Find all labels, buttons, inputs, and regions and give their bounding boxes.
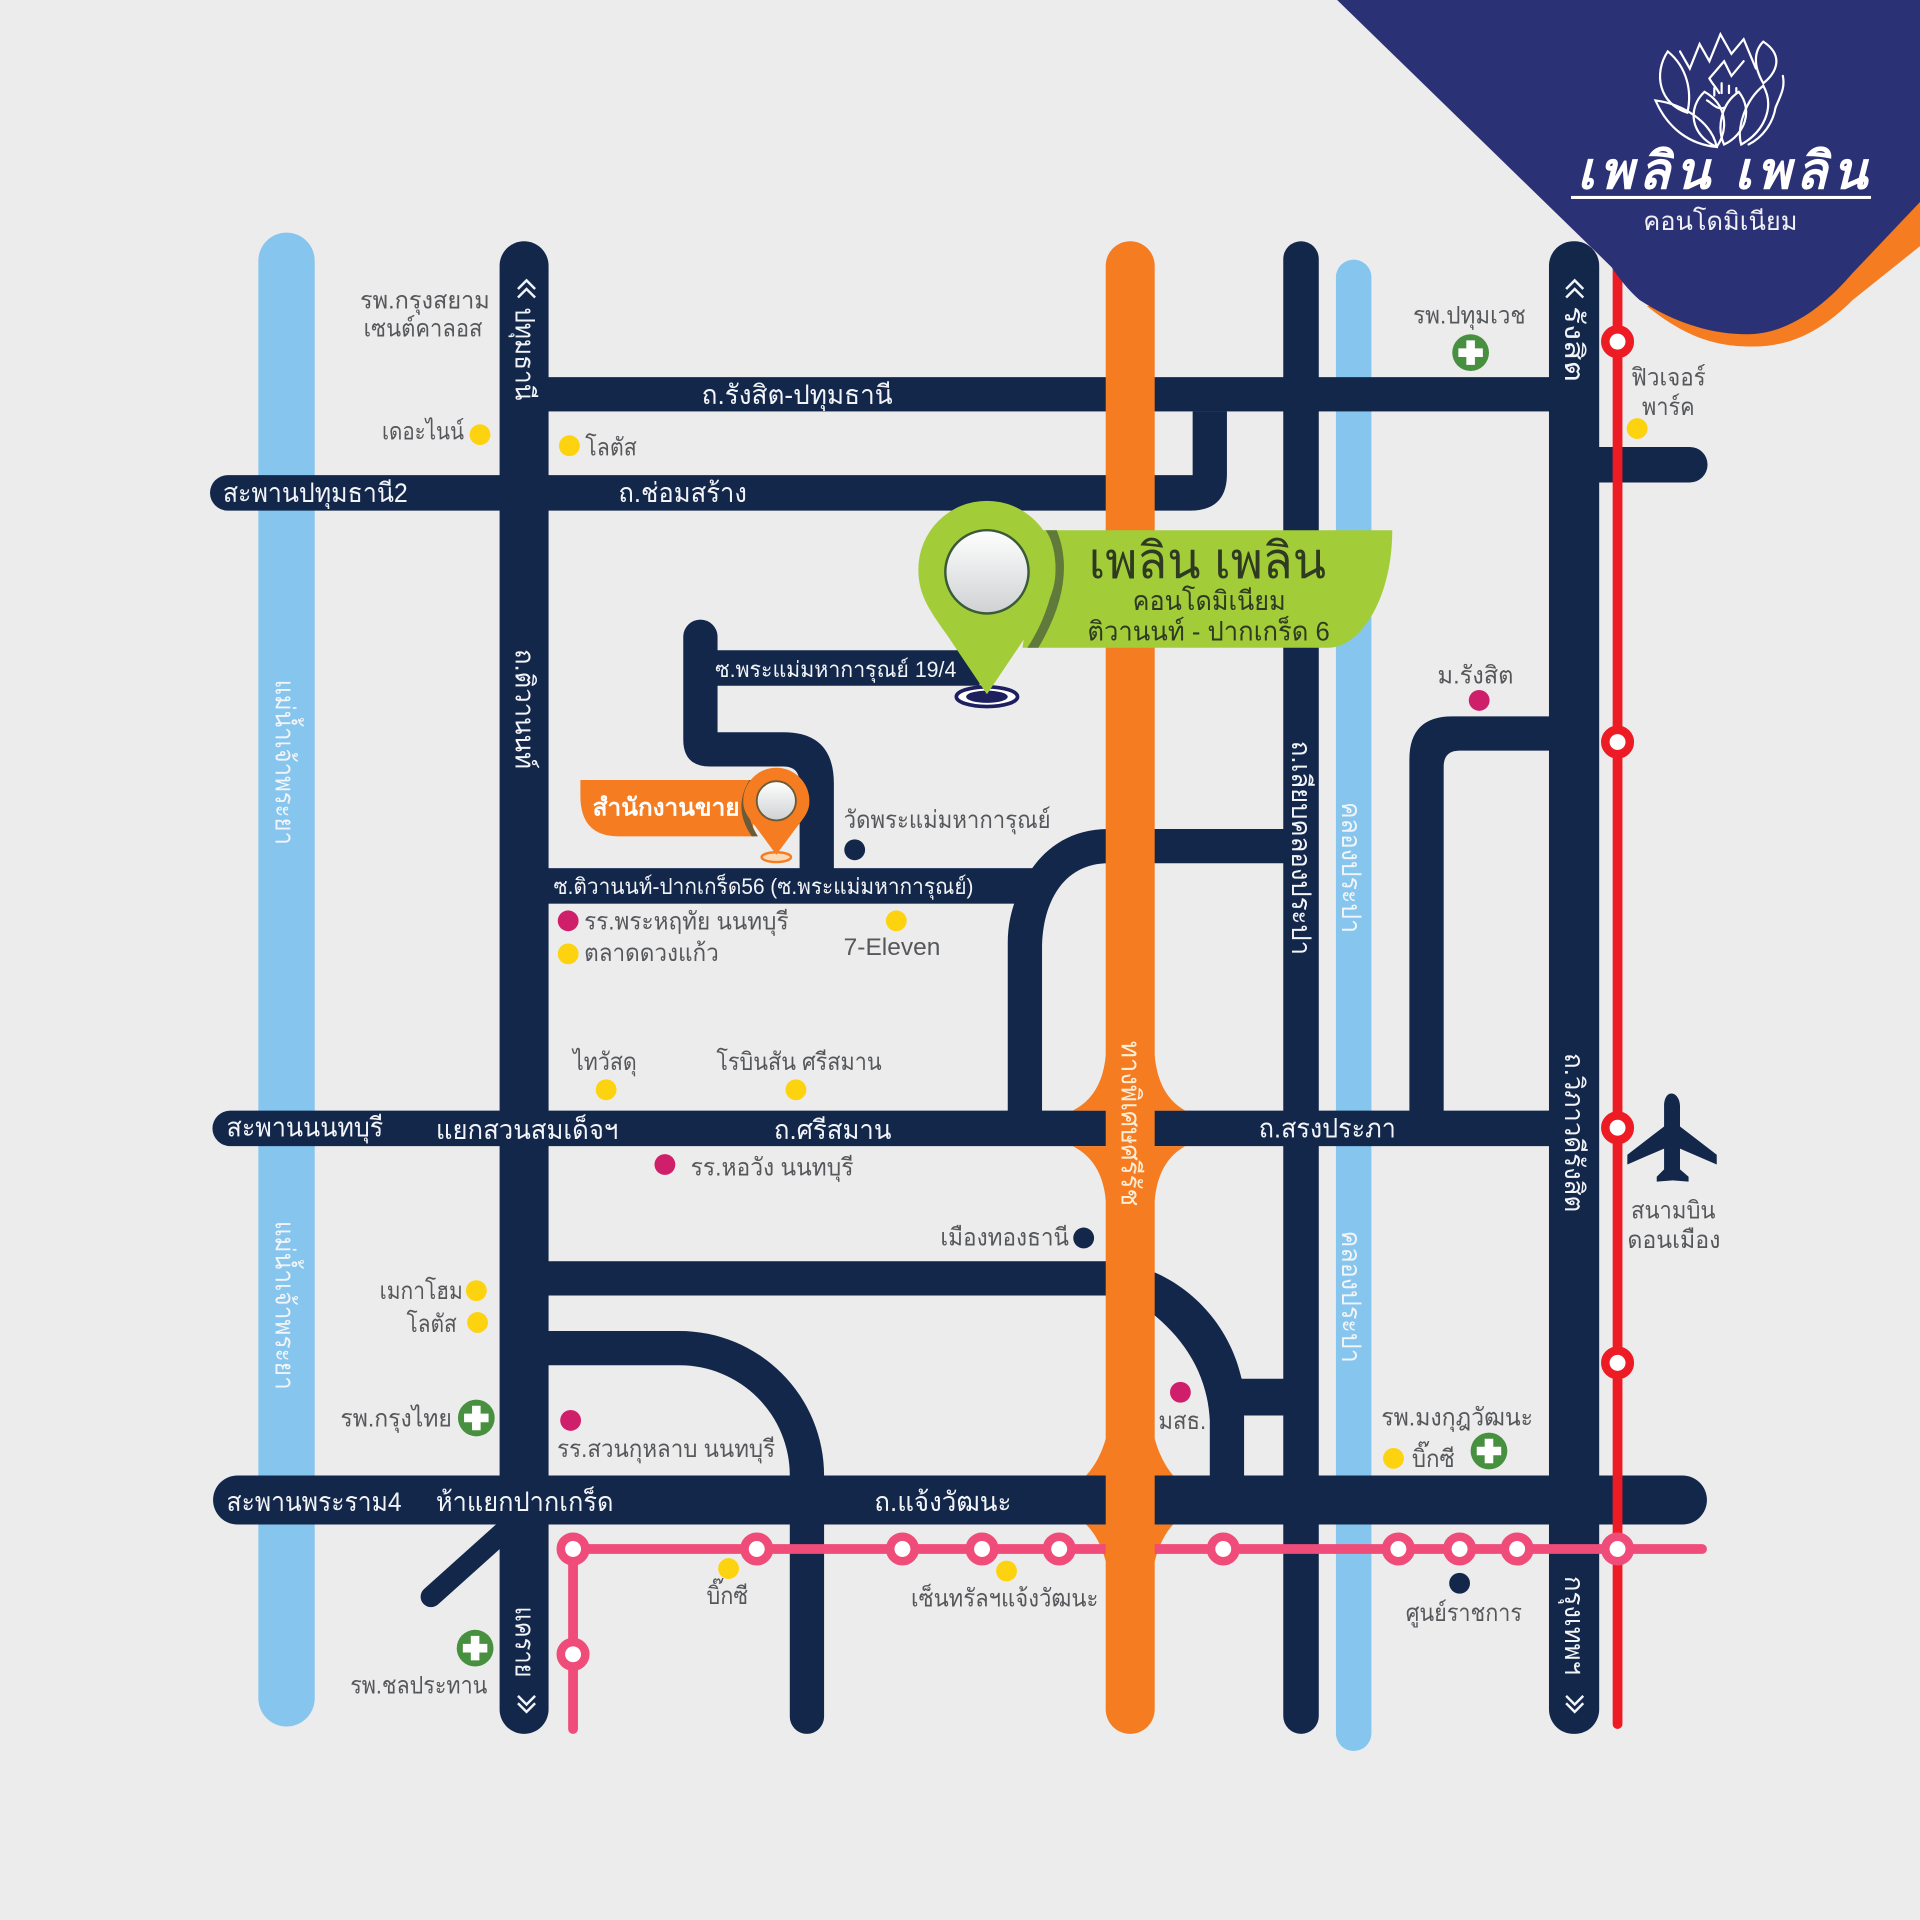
landmark dots: yellow [466, 418, 1648, 1581]
road labels horizontal: ถ.แจ้งวัฒนะ [874, 1487, 1011, 1517]
road labels vertical: ถ.วิภาวดีรังสิต [1559, 1053, 1589, 1212]
landmark labels: สนามบิน [1631, 1197, 1716, 1224]
landmark labels: รร.สวนกุหลาบ นนทบุรี [557, 1436, 775, 1464]
landmark labels [340, 288, 1720, 1699]
road labels vertical: แม่น้ำเจ้าพระยา [270, 1221, 305, 1390]
landmark labels: ศูนย์ราชการ [1406, 1599, 1522, 1628]
road labels vertical: ถ.เลียบคลองประปา [1286, 741, 1316, 955]
road labels vertical: แคราย [510, 1607, 540, 1678]
landmark labels: เซ็นทรัลฯแจ้งวัฒนะ [911, 1583, 1098, 1613]
project callout: green pin and banner: คอนโดมิเนียม [1133, 586, 1286, 616]
header corner panel [1337, 0, 1920, 347]
landmark labels: มสธ. [1158, 1408, 1206, 1435]
logotype: เพลิน เพลิน [1577, 142, 1869, 200]
road labels horizontal: ถ.สรงประภา [1259, 1114, 1396, 1144]
landmark labels: ดอนเมือง [1627, 1227, 1720, 1254]
road labels horizontal: ห้าแยกปากเกร็ด [436, 1485, 613, 1517]
landmark labels: รพ.กรุงไทย [340, 1405, 452, 1434]
landmark labels: บิ๊กซี [1412, 1440, 1455, 1473]
sales office callout: orange pin and banner: สำนักงานขาย [593, 795, 740, 822]
icons: hospital crosses [457, 334, 1507, 1667]
landmark labels: ตลาดดวงแก้ว [584, 940, 719, 967]
landmark labels: เมกาโฮม [380, 1277, 463, 1305]
road labels horizontal: ถ.รังสิต-ปทุมธานี [702, 380, 893, 411]
landmark labels: ม.รังสิต [1438, 662, 1513, 689]
road labels horizontal: ถ.ช่อมสร้าง [618, 478, 747, 508]
landmark labels: รพ.มงกุฎวัฒนะ [1381, 1404, 1533, 1432]
direction chevrons [518, 280, 1583, 1712]
road labels vertical: กรุงเทพฯ [1558, 1576, 1589, 1675]
landmark labels: พาร์ค [1642, 393, 1695, 421]
icon: lotus logo [1656, 34, 1784, 147]
landmark labels: วัดพระแม่มหาการุณย์ [844, 806, 1051, 835]
landmark labels: โลตัส [585, 434, 637, 462]
road labels horizontal: ซ.พระแม่มหาการุณย์ 19/4 [715, 657, 956, 683]
sales office callout: orange pin and banner [580, 768, 809, 862]
landmark labels: บิ๊กซี [707, 1577, 748, 1610]
road labels vertical: รังสิต [1559, 306, 1589, 382]
road labels horizontal: สะพานพระราม4 [227, 1487, 402, 1517]
road labels horizontal: แยกสวนสมเด็จฯ [436, 1113, 618, 1145]
road labels vertical: ปทุมธานี [509, 307, 540, 400]
road labels horizontal: ถ.ศรีสมาน [774, 1115, 891, 1145]
road labels vertical: แม่น้ำเจ้าพระยา [270, 680, 305, 845]
road labels vertical: ถ.ติวานนท์ [510, 649, 540, 769]
road labels horizontal: ซ.ติวานนท์-ปากเกร็ด56 (ซ.พระแม่มหาการุณย์) [553, 872, 973, 900]
landmark dots: pink [558, 690, 1490, 1431]
road labels horizontal: สะพานปทุมธานี2 [223, 478, 408, 509]
road labels vertical: คลองประปา [1336, 1231, 1366, 1363]
pink rail line [561, 1537, 1702, 1729]
road labels horizontal [223, 380, 1396, 1517]
project callout: green pin and banner: เพลิน เพลิน [1089, 533, 1326, 589]
road labels vertical: คลองประปา [1336, 802, 1366, 933]
landmark labels: เซนต์คาลอส [364, 315, 483, 343]
landmark labels: ฟิวเจอร์ [1631, 364, 1706, 392]
landmark labels: 7-Eleven [844, 934, 940, 961]
road labels horizontal: สะพานนนทบุรี [227, 1112, 383, 1143]
landmark dots: navy [844, 839, 1470, 1594]
landmark labels: รร.พระหฤทัย นนทบุรี [584, 908, 789, 936]
road network [210, 241, 1708, 1734]
landmark labels: ไทวัสดุ [571, 1048, 637, 1077]
landmark labels: รพ.ปทุมเวช [1413, 302, 1526, 330]
landmark labels: เดอะไนน์ [382, 418, 464, 446]
project callout: green pin and banner: ติวานนท์ - ปากเกร็ด 6 [1087, 614, 1330, 646]
canal: Khlong Prapa [1336, 260, 1371, 1751]
road labels vertical: ทางพิเศษศรีรัช [1116, 1041, 1146, 1206]
river: Chao Phraya [258, 233, 315, 1727]
landmark labels: รพ.ชลประทาน [350, 1672, 488, 1699]
red rail line [1605, 263, 1630, 1724]
expressway [1106, 241, 1155, 1734]
landmark labels: เมืองทองธานี [940, 1224, 1069, 1251]
header corner panel: คอนโดมิเนียม [1643, 207, 1798, 236]
landmark labels: โรบินสัน ศรีสมาน [716, 1048, 882, 1076]
project callout: green pin and banner [918, 501, 1392, 707]
expressway interchange flares [1073, 1056, 1185, 1561]
landmark labels: โลตัส [407, 1310, 457, 1338]
icon: airplane [1627, 1093, 1717, 1182]
road labels vertical [270, 306, 1589, 1678]
landmark labels: รพ.กรุงสยาม [360, 288, 490, 316]
landmark labels: รร.หอวัง นนทบุรี [691, 1155, 853, 1183]
